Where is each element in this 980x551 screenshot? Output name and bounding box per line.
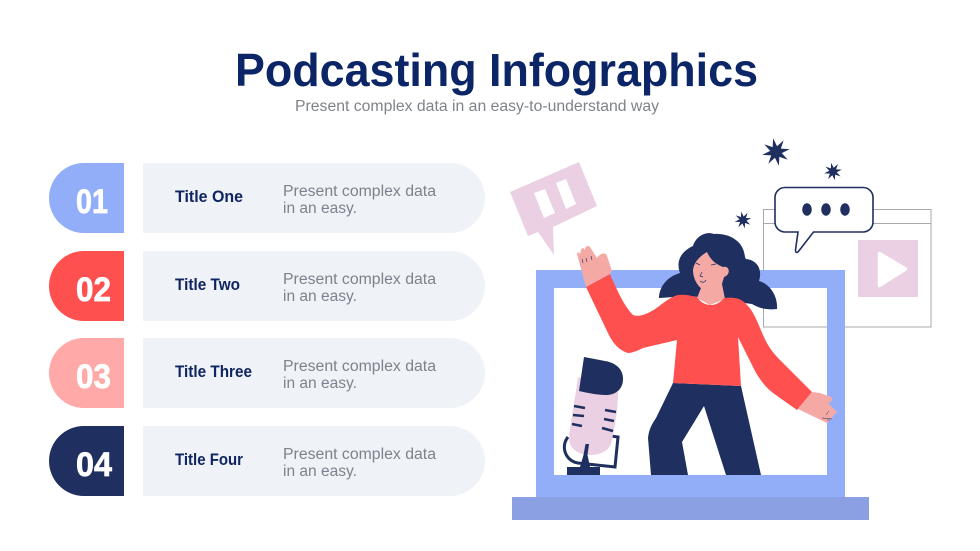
lower hand finger lines	[822, 411, 832, 420]
panel background 02	[143, 251, 485, 321]
number 04: 04	[76, 446, 112, 484]
heading: Title Four: Title Four	[175, 451, 244, 469]
number 02: 02	[76, 271, 111, 309]
icon: chat bubble with dots	[775, 188, 873, 252]
description 04: Present complex data	[283, 446, 436, 463]
list row 04	[49, 426, 485, 496]
list row 01	[49, 163, 485, 233]
number badge 01	[49, 163, 124, 233]
list row 02	[49, 251, 485, 321]
raised hand finger lines	[582, 256, 592, 263]
trousers	[648, 383, 761, 475]
subtitle: Present complex data in an easy-to-understand way	[295, 98, 659, 115]
panel background 01	[143, 163, 485, 233]
description 04: in an easy.	[283, 463, 357, 480]
heading: Title One: Title One	[175, 188, 243, 206]
panel background 03	[143, 338, 485, 408]
description 01: in an easy.	[283, 200, 357, 217]
panel background 04	[143, 426, 485, 496]
heading: Title Two: Title Two	[175, 276, 240, 294]
number badge 02	[49, 251, 124, 321]
icon: video player window	[764, 210, 931, 327]
description 03: in an easy.	[283, 375, 357, 392]
illustration: podcaster at laptop	[510, 135, 931, 520]
description 03: Present complex data	[283, 358, 436, 375]
microphone	[564, 357, 623, 475]
number badge 03	[49, 338, 124, 408]
number badge 04	[49, 426, 124, 496]
person	[577, 233, 837, 475]
hair	[659, 233, 777, 309]
number 03: 03	[76, 358, 111, 396]
title: Podcasting Infographics	[235, 44, 758, 96]
description 01: Present complex data	[283, 183, 436, 200]
icon: stars	[733, 135, 844, 230]
red sweater	[586, 274, 812, 410]
description 02: Present complex data	[283, 271, 436, 288]
facial features	[696, 263, 716, 282]
list row 03	[49, 338, 485, 408]
neck and face	[693, 252, 729, 305]
number 01: 01	[76, 183, 108, 221]
heading: Title Three: Title Three	[175, 363, 252, 381]
description 02: in an easy.	[283, 288, 357, 305]
laptop	[512, 270, 869, 520]
lower hand	[798, 392, 837, 423]
raised hand	[577, 246, 612, 287]
icon: pause speech bubble	[510, 162, 597, 255]
